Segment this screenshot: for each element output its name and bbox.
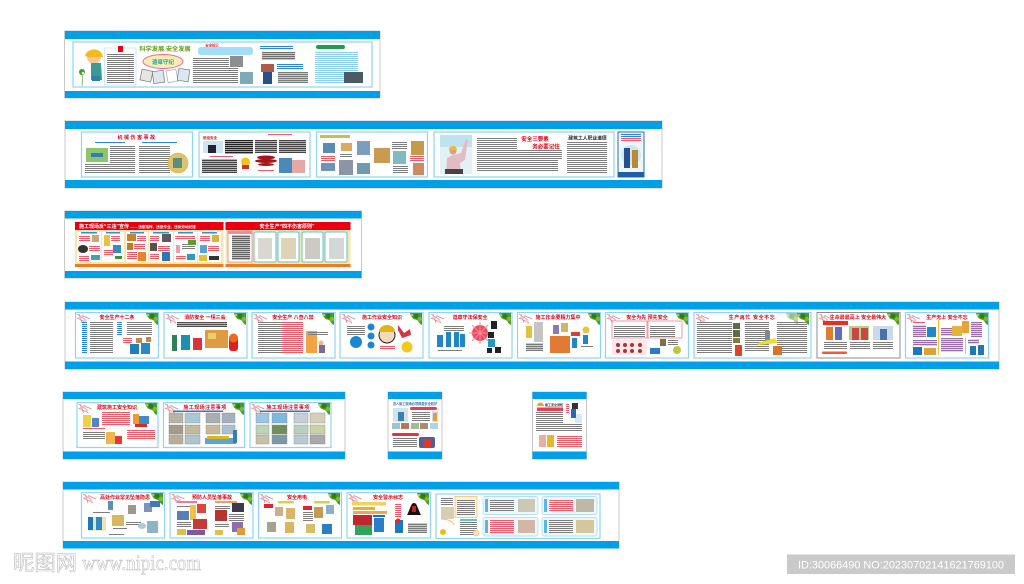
- heading: 预防人员坠落事故: [192, 494, 232, 501]
- icon: hard hat: [537, 403, 544, 406]
- heading: 施工现场反“三违”宣传 —— 违章指挥、违章作业、违反劳动纪律: [79, 223, 196, 230]
- panel: safety warning signs: [347, 492, 430, 538]
- panel: combined cards: [436, 494, 600, 538]
- heading: science and safety: 科学发展 安全发展: [139, 45, 191, 53]
- image id stamp: ID:30066490 NO:20230702141621769100: [798, 560, 1004, 572]
- panel: production first: [906, 312, 988, 358]
- card: scaffold: [542, 496, 597, 514]
- heading: three elements: 务必要记住: [532, 142, 560, 150]
- panel: illustrated safety cases: [316, 132, 428, 177]
- panel: production and safety: [694, 312, 811, 358]
- heading: 安全生产“四不伤害原则”: [259, 223, 315, 230]
- heading: 施工作业安全知识: [362, 314, 402, 321]
- heading: 安全警示标志: [373, 494, 403, 501]
- watermark: nipic logo: 昵图网: [13, 552, 77, 575]
- watermark: nipic logo: www.nipic.com: [82, 550, 201, 575]
- heading: 安全生产 八查八禁: [272, 314, 314, 321]
- heading: worker ethics: 建筑工人职业道德: [568, 134, 607, 142]
- panel: twelve rules: [76, 312, 158, 358]
- panel: site precautions two: [250, 402, 331, 448]
- card: hoist: [542, 518, 597, 536]
- badge: pink oval: 遵章守纪: [152, 58, 174, 66]
- rule cards: [254, 232, 347, 262]
- heading: 进入施工现场必须佩戴安全防护: [393, 401, 437, 406]
- cards: [77, 232, 221, 262]
- text block: [477, 138, 562, 171]
- heading: 安全用电: [287, 494, 307, 501]
- panel: fire safety: [164, 312, 247, 358]
- card: tower crane: [483, 496, 538, 514]
- heading: 施工现场注意事项: [183, 404, 227, 411]
- panel: building safety knowledge: [77, 402, 158, 448]
- heading: 消防安全 一懂三会: [184, 314, 226, 321]
- wall 5: site precaution boards: [63, 392, 345, 459]
- panel: blue poster: [618, 132, 644, 177]
- wall 3: three violations and four no harm: [64, 211, 362, 278]
- heading: 生产无上 安全不忘: [926, 314, 968, 321]
- heading: 高处作业常见坠落隐患: [100, 494, 150, 501]
- section: rules and tools: [260, 45, 308, 84]
- panel: obey rules: [429, 312, 512, 358]
- icon: workers carrying: [130, 337, 151, 354]
- wall 4: safety rules row: [65, 302, 999, 369]
- panel: electrical safety: [258, 492, 342, 538]
- panel: stay focused: [518, 312, 600, 358]
- text card: safety notes: [104, 46, 136, 85]
- panel: three violations: [75, 222, 224, 267]
- heading: 安全生产十二条: [99, 314, 135, 321]
- wall 2: mechanical injury boards: [65, 121, 662, 188]
- section: site safety text: 安全知识: [205, 42, 219, 48]
- panel: hazard knowledge: [199, 132, 310, 177]
- panel: mechanical injury: [82, 132, 192, 177]
- panel: sharing safety: [817, 312, 900, 358]
- badge: pink oval: [143, 54, 183, 68]
- heading: 生命最最高上 安全最伟大: [830, 314, 886, 321]
- photo: engineer pointing up: [440, 135, 472, 174]
- wall 8: fall and electrical safety boards: [63, 482, 619, 548]
- watermark: nipic logo: [13, 550, 201, 575]
- wall 7: single poster: [532, 392, 586, 459]
- panel: construction safety knowledge: [340, 312, 423, 358]
- heading: 施工作业要精力集中: [535, 314, 581, 321]
- panel: safety first: [606, 312, 688, 358]
- card: formwork: [483, 518, 538, 536]
- icon: cartoon worker with flower: [79, 49, 103, 86]
- heading: 生产再忙 安全不忘: [729, 314, 775, 321]
- image id stamp: [787, 554, 1015, 574]
- heading: 遵章守法保安全: [452, 314, 488, 321]
- list box: [228, 231, 252, 262]
- panel: four no harm principle: [226, 222, 350, 267]
- heading: 班组安全: [203, 135, 217, 140]
- photo cards: [140, 68, 190, 84]
- panel: personal injury prevention: [170, 492, 253, 538]
- heading: three elements: [521, 135, 560, 150]
- panel: work at height: [82, 492, 164, 538]
- heading: 施工现场注意事项: [266, 404, 310, 411]
- heading: 安全为先 预先安全: [626, 314, 668, 321]
- wall 6: single poster: [388, 392, 442, 459]
- section: site safety text: [193, 42, 253, 84]
- heading: 建筑施工安全知识: [97, 404, 137, 411]
- heading: 施工安全须知: [545, 402, 563, 407]
- panel: site precautions one: [164, 402, 244, 448]
- heading: three elements: 安全三要素: [521, 135, 549, 143]
- section: green pill notes: [315, 45, 363, 83]
- wall 1: scientific development: [64, 31, 380, 98]
- panel: eight checks: [252, 312, 335, 358]
- text and cartoon column: [440, 496, 479, 536]
- panel: three safety elements: [434, 132, 614, 177]
- heading: 机械伤害事故: [117, 134, 157, 141]
